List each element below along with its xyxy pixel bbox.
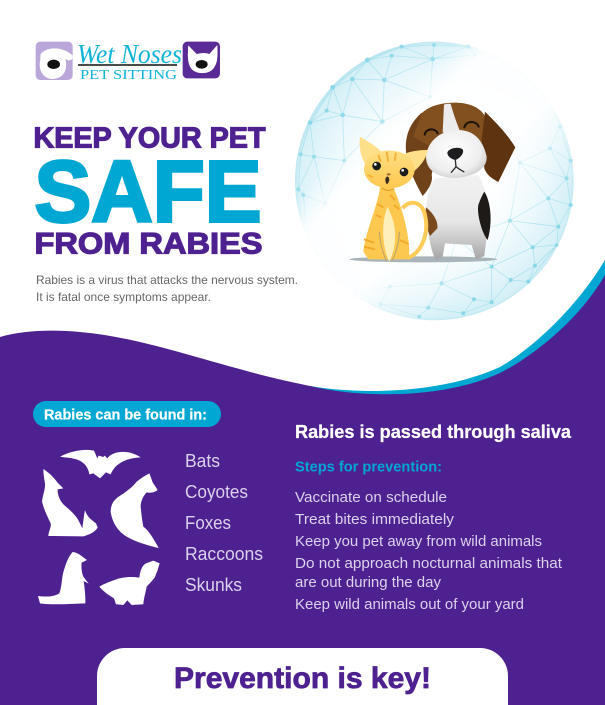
animal list: Skunks (185, 575, 242, 595)
heading: Rabies is passed through saliva (295, 422, 572, 442)
animal list: Coyotes (185, 482, 248, 502)
icon: cat (360, 137, 428, 262)
icon: lavender dog tile (36, 42, 73, 80)
cat and dog illustration (349, 103, 515, 262)
prevention steps: Treat bites immediately (295, 511, 455, 528)
title: FROM RABIES (34, 228, 262, 260)
intro text: Rabies is a virus that attacks the nervous system. (36, 273, 298, 287)
title: KEEP YOUR PET (34, 122, 266, 154)
logo subtitle: PET SITTING (80, 68, 177, 83)
icon: dog (406, 103, 515, 260)
panel: rabies can be found in (33, 401, 263, 605)
intro text: It is fatal once symptoms appear. (36, 290, 211, 304)
animal list (185, 451, 263, 595)
callout: prevention is key: Prevention is key! (174, 662, 431, 695)
icon: fox (111, 473, 159, 548)
pill heading: Rabies can be found in: (44, 408, 207, 424)
prevention steps: are out during the day (295, 574, 441, 591)
pill heading (33, 401, 221, 427)
icon: purple dog tile (183, 42, 220, 78)
callout: prevention is key (97, 648, 508, 705)
title: SAFE (34, 144, 262, 240)
prevention steps: Keep you pet away from wild animals (295, 533, 542, 550)
panel: transmission and prevention (295, 422, 572, 613)
prevention steps: Do not approach nocturnal animals that (295, 555, 563, 572)
subheading: Steps for prevention: (295, 460, 442, 476)
ground shadow (349, 256, 497, 262)
icon: skunk (99, 561, 160, 605)
logo wordmark: Wet Noses (77, 39, 182, 69)
globe with cat and dog (295, 42, 574, 320)
animal list: Raccoons (185, 544, 263, 564)
globe mesh (295, 42, 574, 320)
icon: coyote (42, 469, 98, 536)
icon: raccoon (38, 552, 89, 604)
animal silhouettes (38, 450, 160, 605)
logo (36, 39, 220, 83)
animal list: Bats (185, 451, 220, 471)
icon: bat (60, 450, 141, 478)
animal list: Foxes (185, 513, 231, 533)
intro text (36, 273, 298, 304)
prevention steps (295, 489, 563, 613)
prevention steps: Keep wild animals out of your yard (295, 596, 524, 613)
prevention steps: Vaccinate on schedule (295, 489, 447, 506)
background wave (0, 260, 605, 705)
title (34, 122, 266, 260)
